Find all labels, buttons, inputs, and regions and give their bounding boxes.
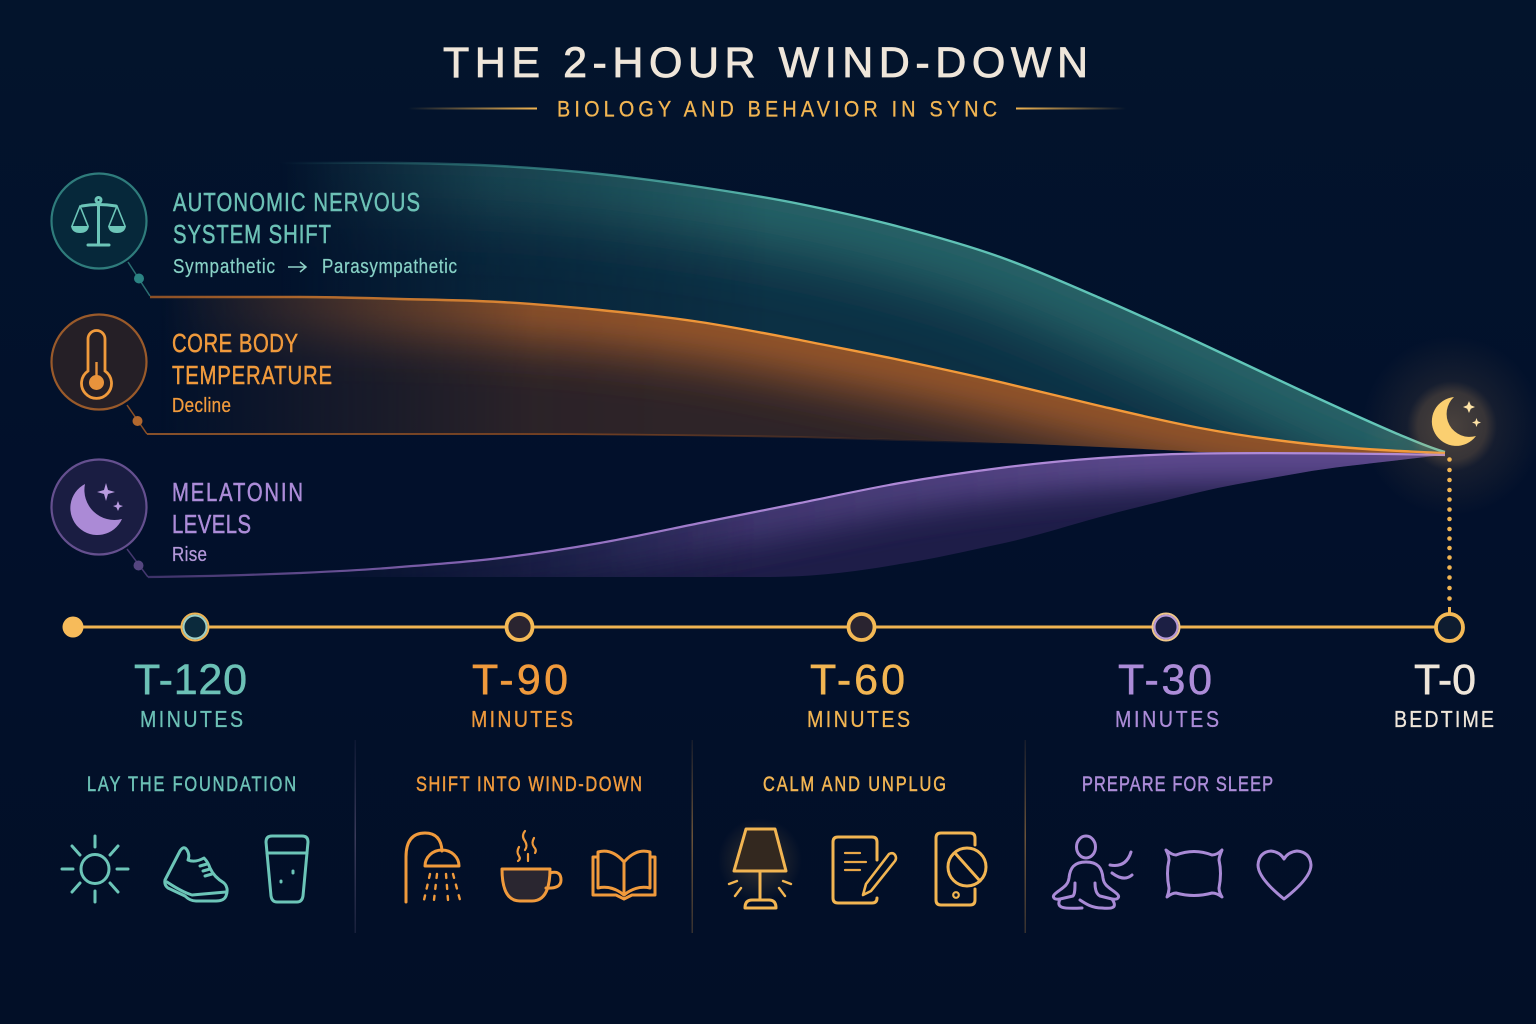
label: core body heading: CORE BODY [172, 329, 298, 358]
icon: bedside lamp [718, 818, 802, 908]
label: temperature heading: TEMPERATURE [172, 361, 332, 390]
moon endpoint glow [1362, 336, 1536, 516]
icon: running shoe [165, 848, 227, 901]
icon: phone with no symbol [936, 833, 986, 905]
label: sympathetic to parasympathetic: Parasympathetic [322, 255, 457, 277]
curve band: core body temperature [140, 290, 1450, 460]
subtitle: BIOLOGY AND BEHAVIOR IN SYNC [557, 97, 997, 122]
time label: T-0 bedtime [1394, 656, 1494, 732]
icon: pillow [1166, 850, 1222, 897]
icon: coffee cup [502, 831, 561, 901]
icon: sun [62, 836, 128, 902]
heading: calm and unplug: CALM AND UNPLUG [763, 772, 946, 795]
icon: meditating person [1053, 836, 1132, 908]
label: decline: Decline [172, 394, 231, 416]
icon: heart [1258, 851, 1311, 899]
icon: glass of water [266, 836, 308, 902]
icon: moon and stars [52, 460, 148, 577]
panel: autonomic nervous system shift [52, 174, 457, 296]
time label: T-60 [807, 656, 910, 732]
time label: T-120: T-120 [134, 656, 247, 704]
panel: core body temperature [52, 314, 332, 434]
panel: prepare for sleep [1053, 772, 1311, 908]
panel: melatonin levels [52, 460, 303, 577]
heading: prepare for sleep: PREPARE FOR SLEEP [1082, 772, 1273, 795]
icon: notepad and pencil [833, 837, 896, 903]
time label: T-30: T-30 [1118, 656, 1212, 704]
time label: T-30: MINUTES [1115, 707, 1219, 732]
panel: calm and unplug [718, 772, 986, 908]
icon: open book [593, 851, 655, 899]
chart: converging biological curves [140, 150, 1450, 580]
label: levels heading: LEVELS [172, 510, 251, 539]
panel: shift into wind-down [406, 772, 655, 902]
time label: T-30 [1115, 656, 1219, 732]
dotted line from moon to bedtime [1447, 457, 1452, 615]
heading: lay the foundation: LAY THE FOUNDATION [87, 772, 296, 795]
time label: T-0 bedtime: BEDTIME [1394, 707, 1494, 732]
label: sympathetic to parasympathetic: Sympathetic [173, 255, 275, 277]
curve band: autonomic nervous system [296, 162, 1446, 452]
label: autonomic heading: AUTONOMIC NERVOUS [173, 188, 420, 217]
panel: lay the foundation [62, 772, 308, 902]
heading: shift into wind-down: SHIFT INTO WIND-DOWN [416, 772, 642, 795]
label: system shift heading: SYSTEM SHIFT [173, 220, 331, 249]
icon: shower [406, 833, 460, 902]
label: rise: Rise [172, 543, 207, 565]
time label: T-90 [471, 656, 573, 732]
time label: T-90: T-90 [472, 656, 568, 704]
time label: T-60: T-60 [810, 656, 905, 704]
label: melatonin heading: MELATONIN [172, 478, 303, 507]
icon: balance scale [52, 174, 150, 296]
icon: thermometer [52, 314, 147, 434]
time label: T-90: MINUTES [471, 707, 573, 732]
label: sympathetic to parasympathetic [173, 255, 457, 277]
timeline [62, 614, 1463, 641]
title: THE 2-HOUR WIND-DOWN [443, 39, 1088, 87]
time label: T-0 bedtime: T-0 [1414, 656, 1476, 704]
time label: T-60: MINUTES [807, 707, 910, 732]
time label: T-120 [134, 656, 247, 732]
curve band: melatonin [140, 450, 1450, 580]
time label: T-120: MINUTES [140, 707, 243, 732]
